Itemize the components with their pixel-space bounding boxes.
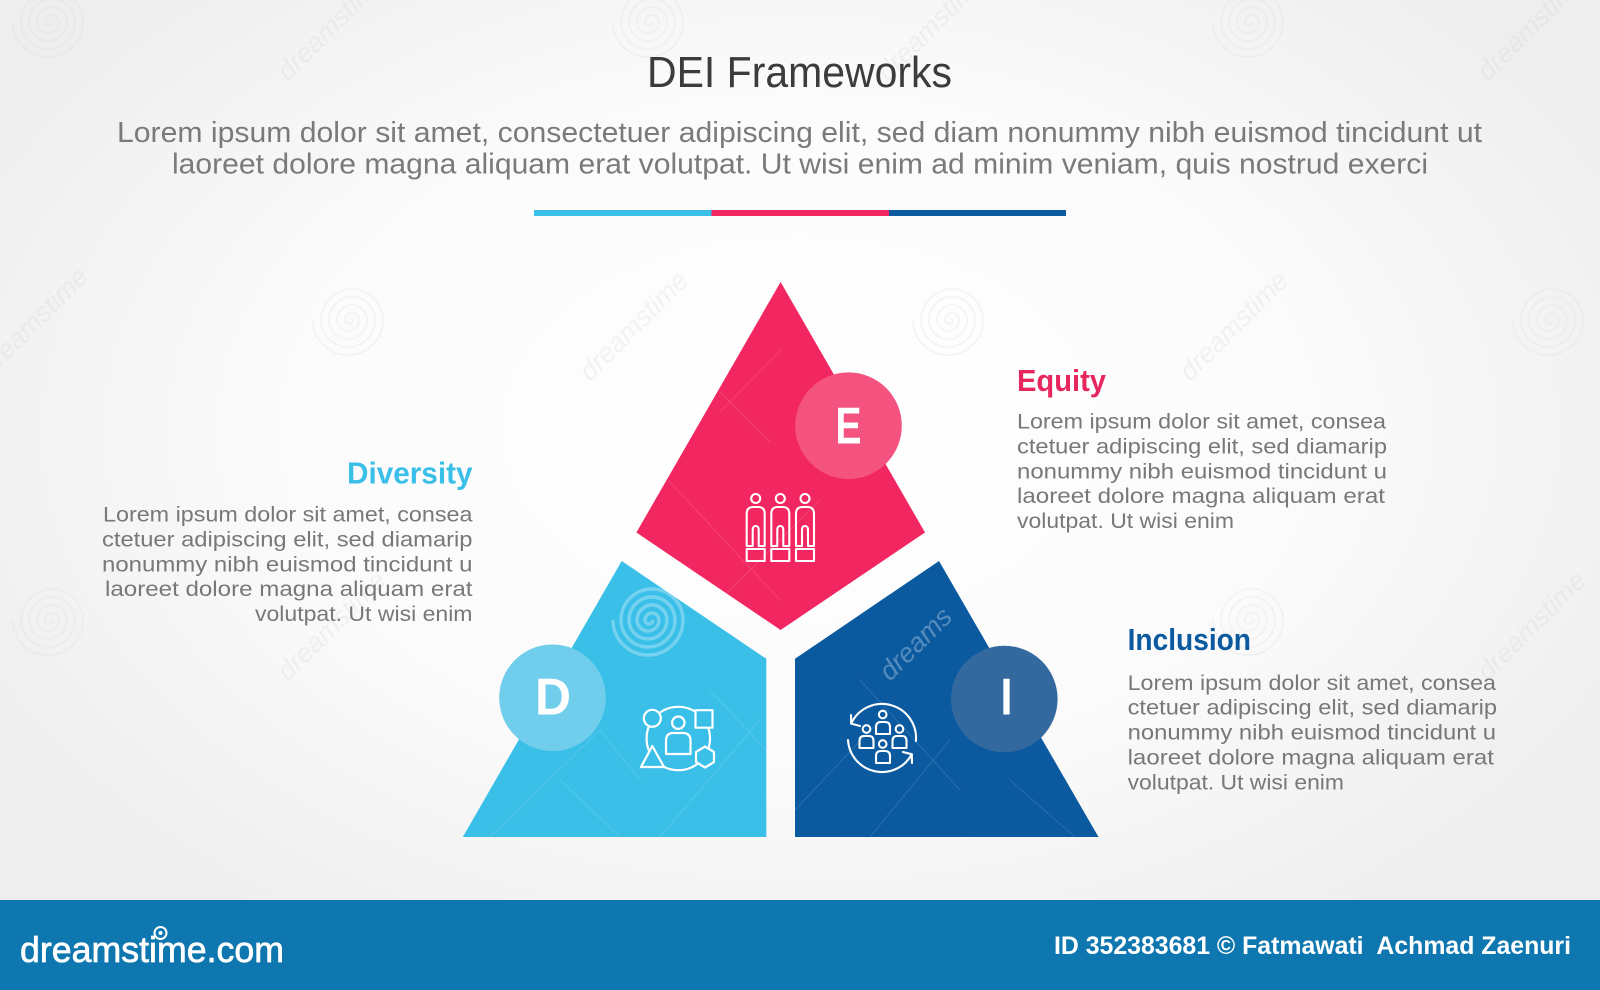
- text: dreams: [873, 601, 958, 686]
- body: Inclusion description: [1128, 671, 1497, 794]
- body: Diversity description: ctetuer adipiscing elit, sed diamarip: [102, 527, 473, 551]
- body: Inclusion description: ctetuer adipiscing elit, sed diamarip: [1128, 696, 1497, 720]
- badge: I: I: [1000, 668, 1012, 726]
- badge: D: [499, 644, 606, 751]
- panel: inclusion text: [1128, 622, 1497, 794]
- icon: diverse shapes around a person: [641, 707, 714, 770]
- text: dreamstime: [573, 265, 694, 386]
- body: Diversity description: laoreet dolore magna aliquam erat: [105, 577, 473, 601]
- panel: diversity segment: [463, 561, 766, 837]
- body: Equity description: nonummy nibh euismod tincidunt u: [1017, 459, 1387, 483]
- badge: E: E: [836, 398, 862, 456]
- icon: three people on pedestals: [747, 494, 814, 561]
- panel: diversity text: [102, 456, 473, 626]
- body: Inclusion description: Lorem ipsum dolor sit amet, consea: [1128, 671, 1496, 695]
- panel: equity text: [1017, 363, 1387, 533]
- badge: E: [795, 372, 902, 479]
- credit line: ID 352383681 © Fatmawati Achmad Zaenuri: [1054, 932, 1571, 960]
- heading: Diversity: Diversity: [347, 456, 473, 491]
- body: Diversity description: [102, 502, 473, 626]
- body: Equity description: volutpat. Ut wisi enim: [1017, 509, 1234, 533]
- panel: inclusion segment: [795, 561, 1098, 837]
- panel: equity segment: [636, 282, 925, 630]
- subtitle text block: Lorem ipsum dolor sit amet, consectetuer adipiscing elit, sed diam nonummy nibh euismod tincidunt ut: [117, 117, 1482, 149]
- heading: Equity: Equity: [1017, 363, 1107, 398]
- logo: dreamstime.com: dreamstime.com: [20, 929, 284, 970]
- text: dreamstime: [271, 565, 392, 686]
- footer band: [0, 900, 1600, 990]
- text: dreamstime: [1173, 265, 1294, 386]
- body: Diversity description: nonummy nibh euismod tincidunt u: [102, 552, 472, 576]
- badge: I: [951, 646, 1058, 752]
- body: Inclusion description: volutpat. Ut wisi enim: [1128, 770, 1344, 794]
- body: Diversity description: volutpat. Ut wisi enim: [255, 602, 472, 626]
- badge: D: D: [535, 668, 571, 726]
- subtitle text block: [117, 117, 1482, 180]
- tri-colour divider: [534, 210, 1066, 216]
- body: Equity description: Lorem ipsum dolor sit amet, consea: [1017, 410, 1386, 434]
- body: Inclusion description: nonummy nibh euismod tincidunt u: [1128, 721, 1496, 745]
- icon: people in a circular arrow cycle: [848, 704, 916, 772]
- triangle chart: [463, 282, 1098, 837]
- body: Equity description: ctetuer adipiscing elit, sed diamarip: [1017, 434, 1387, 458]
- body: Diversity description: Lorem ipsum dolor sit amet, consea: [103, 502, 473, 526]
- heading: Inclusion: Inclusion: [1128, 622, 1251, 657]
- body: Inclusion description: laoreet dolore magna aliquam erat: [1128, 745, 1494, 769]
- body: Equity description: laoreet dolore magna aliquam erat: [1017, 484, 1385, 508]
- body: Equity description: [1017, 410, 1387, 533]
- subtitle text block: laoreet dolore magna aliquam erat volutpat. Ut wisi enim ad minim veniam, quis nostrud exerci: [172, 148, 1428, 180]
- title: DEI Frameworks: [647, 48, 952, 97]
- text: dreamstime: [1471, 565, 1592, 686]
